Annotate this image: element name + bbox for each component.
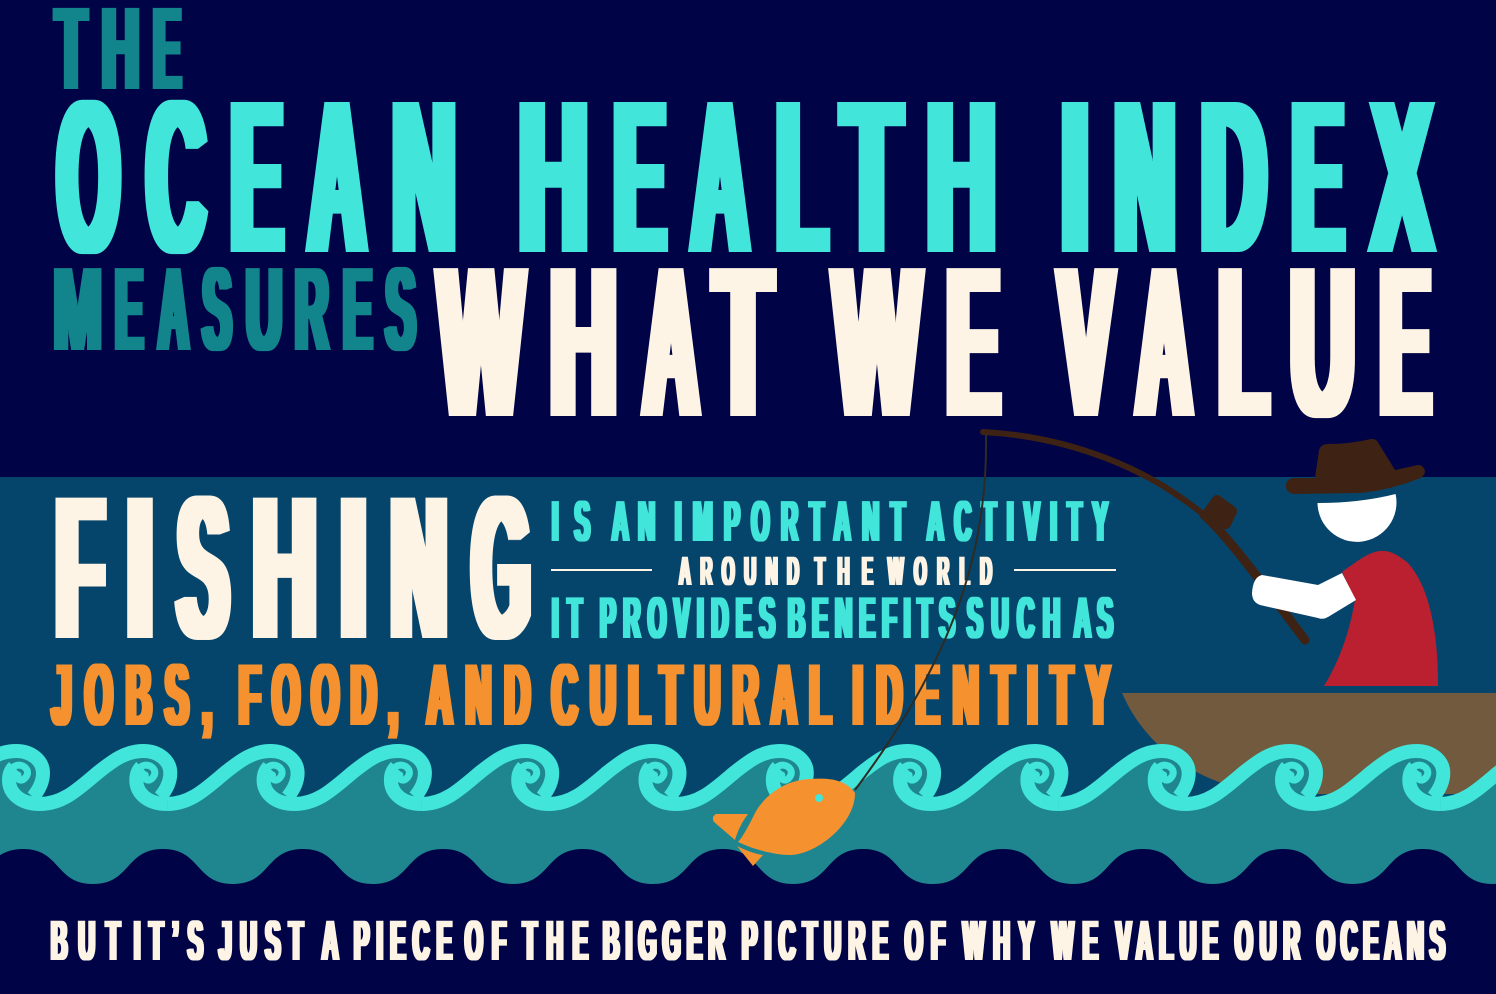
head xyxy=(1318,494,1396,542)
fish eye xyxy=(815,794,823,802)
hat xyxy=(1286,439,1425,494)
title: WHAT WE VALUE: W xyxy=(439,221,523,462)
closing line of text: WE xyxy=(1052,909,1098,973)
closing line of text: IT’S xyxy=(134,909,203,973)
title: WHAT WE VALUE: A xyxy=(644,221,698,462)
text: is an important activity xyxy=(552,489,1108,554)
arm xyxy=(1252,573,1356,619)
text: is an important activity: ACTIVITY xyxy=(927,489,1108,554)
title word: THE xyxy=(56,0,181,115)
title word: MEASURES: U xyxy=(246,243,282,376)
text: jobs, food, and cultural identity xyxy=(52,645,1110,744)
title: OCEAN HEALTH INDEX: N xyxy=(393,56,455,299)
fishing rod xyxy=(983,432,1305,640)
title word: MEASURES: A xyxy=(158,243,188,376)
heading: FISHING: I xyxy=(340,454,367,682)
fisherman xyxy=(983,432,1438,686)
text: around the world xyxy=(679,548,992,594)
text: it provides benefits such as: BENEFITS xyxy=(788,585,955,651)
closing line of text: BUT xyxy=(51,909,120,973)
closing line of text: OF xyxy=(905,909,945,973)
closing line of text: JUST xyxy=(219,909,303,973)
closing line of text: OF xyxy=(465,909,506,973)
text: jobs, food, and cultural identity: FOOD, xyxy=(239,645,398,744)
text: it provides benefits such as: PROVIDES xyxy=(600,585,775,651)
text: is an important activity: IS xyxy=(552,489,590,554)
text: it provides benefits such as: SUCH xyxy=(967,585,1060,651)
title: OCEAN HEALTH INDEX: H xyxy=(927,56,996,299)
title: OCEAN HEALTH INDEX: L xyxy=(777,56,827,299)
closing line of text: WHY xyxy=(963,909,1034,973)
text: it provides benefits such as: AS xyxy=(1074,585,1113,651)
heading: FISHING: N xyxy=(391,454,446,682)
title word: MEASURES: M xyxy=(54,243,102,376)
heading: FISHING xyxy=(56,454,530,682)
divider lines xyxy=(551,569,1116,571)
closing line of text: PICTURE xyxy=(742,909,888,973)
text: around the world: AROUND xyxy=(679,548,799,594)
fish xyxy=(713,779,855,866)
title word: MEASURES xyxy=(54,243,415,376)
title word: MEASURES: E xyxy=(116,243,143,376)
closing line of text: THE xyxy=(523,909,588,973)
title: WHAT WE VALUE: A xyxy=(1137,221,1191,462)
fish body xyxy=(738,779,855,855)
title: OCEAN HEALTH INDEX: H xyxy=(519,56,588,299)
infographic: S xyxy=(386,243,415,376)
waves: dark navy lower band xyxy=(0,849,1496,994)
title: WHAT WE VALUE xyxy=(439,221,1430,462)
text: it provides benefits such as xyxy=(552,585,1113,651)
title: OCEAN HEALTH INDEX: E xyxy=(232,56,282,299)
text: around the world: THE xyxy=(815,548,873,594)
title word: MEASURES: E xyxy=(343,243,372,376)
title: OCEAN HEALTH INDEX: N xyxy=(1115,56,1175,299)
heading: FISHING: F xyxy=(56,454,104,682)
closing line of text: VALUE xyxy=(1116,909,1218,973)
title: OCEAN HEALTH INDEX: E xyxy=(1292,56,1343,299)
title word: MEASURES: R xyxy=(295,243,328,376)
closing line of text: BIGGER xyxy=(603,909,725,973)
title: OCEAN HEALTH INDEX: D xyxy=(1201,56,1266,299)
title: OCEAN HEALTH INDEX: A xyxy=(692,56,748,299)
waves: teal water body xyxy=(0,751,1496,887)
title: WHAT WE VALUE: W xyxy=(834,221,920,462)
shirt xyxy=(1324,551,1438,686)
title: OCEAN HEALTH INDEX: O xyxy=(58,56,119,299)
text: jobs, food, and cultural identity: AND xyxy=(427,645,530,744)
fish tail xyxy=(713,814,763,866)
title: WHAT WE VALUE: L xyxy=(1219,221,1268,462)
text: around the world: WORLD xyxy=(888,548,992,594)
title: WHAT WE VALUE: H xyxy=(550,221,617,462)
text: is an important activity: IMPORTANT xyxy=(675,489,905,554)
title: OCEAN HEALTH INDEX: I xyxy=(1061,56,1089,299)
text: jobs, food, and cultural identity: IDENTITY xyxy=(853,645,1110,744)
title: WHAT WE VALUE: U xyxy=(1291,221,1354,462)
title: WHAT WE VALUE: T xyxy=(714,221,772,462)
middle band xyxy=(0,477,1496,817)
heading: FISHING: H xyxy=(253,454,316,682)
title: OCEAN HEALTH INDEX xyxy=(58,56,1432,299)
text: jobs, food, and cultural identity: JOBS, xyxy=(52,645,212,744)
text: it provides benefits such as: IT xyxy=(552,585,582,651)
fishing line xyxy=(855,434,986,790)
infographic: G xyxy=(473,454,530,682)
waves: turquoise curling crests xyxy=(0,751,1496,804)
closing line of text: PIECE xyxy=(354,909,452,973)
closing line of text: OUR xyxy=(1235,909,1300,973)
closing line of text xyxy=(51,909,1445,973)
text: is an important activity: AN xyxy=(612,489,655,554)
title: OCEAN HEALTH INDEX: C xyxy=(147,56,205,299)
title: OCEAN HEALTH INDEX: E xyxy=(614,56,665,299)
heading: FISHING: S xyxy=(178,454,228,682)
title: WHAT WE VALUE: E xyxy=(947,221,999,462)
closing line of text: OCEANS xyxy=(1317,909,1445,973)
fishing reel xyxy=(1209,500,1232,524)
text: jobs, food, and cultural identity: CULTURAL xyxy=(552,645,831,744)
heading: FISHING: I xyxy=(127,454,153,682)
title word: MEASURES: S xyxy=(203,243,231,376)
title: OCEAN HEALTH INDEX: A xyxy=(309,56,365,299)
title: WHAT WE VALUE: V xyxy=(1059,221,1113,462)
title: OCEAN HEALTH INDEX: T xyxy=(842,56,901,299)
closing line of text: A xyxy=(322,909,338,973)
fishing boat xyxy=(1122,693,1496,794)
